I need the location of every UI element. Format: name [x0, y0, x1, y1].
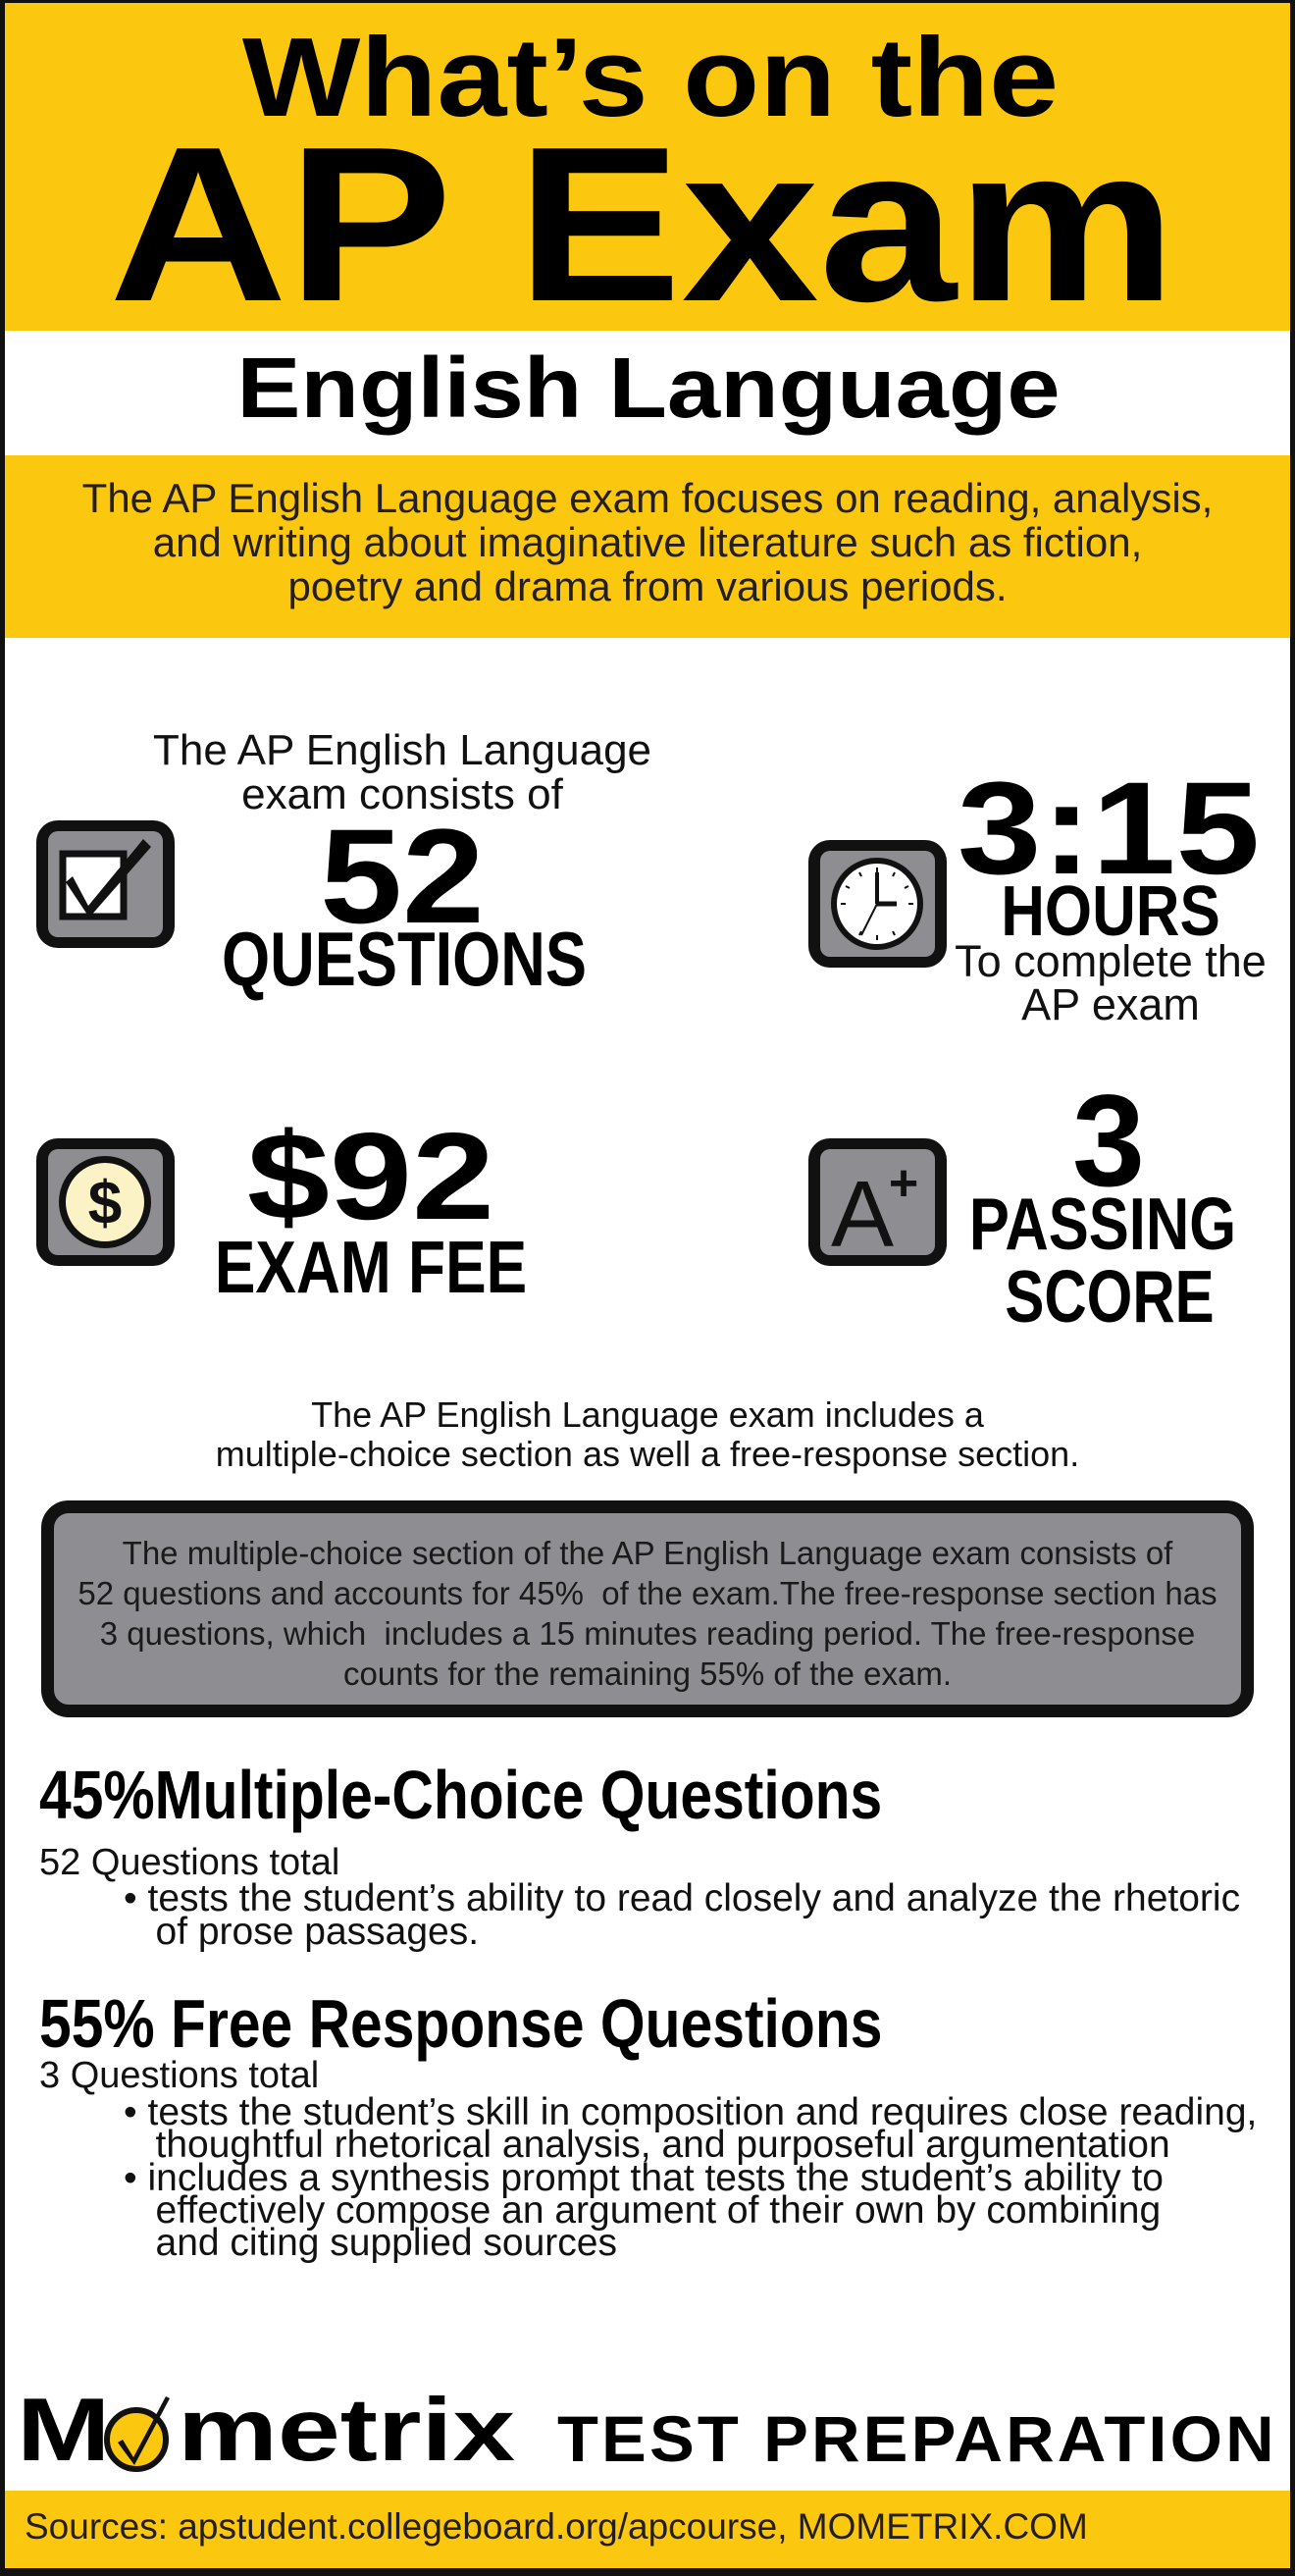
callout text: The multiple-choice section of the AP English Language exam consists of: [123, 1535, 1172, 1571]
icon: A plus grade: A: [831, 1162, 894, 1267]
title line 1: What’s on the: [242, 16, 1059, 140]
logo: Mometrix: [17, 2381, 515, 2480]
footer: sources bar: [0, 2491, 1295, 2569]
intro to sections: multiple-choice section as well a free-response section.: [216, 1434, 1079, 1474]
section: free response: [39, 1985, 1257, 2264]
stat: fee: [36, 1107, 527, 1308]
label SCORE: SCORE: [1005, 1255, 1215, 1338]
intro to sections: The AP English Language exam includes a: [311, 1394, 984, 1435]
logo letter M: M: [17, 2381, 111, 2480]
callout text: 52 questions and accounts for 45% of the exam.The free-response section has: [78, 1575, 1217, 1611]
bullet: • tests the student’s ability to read closely and analyze the rhetoric: [124, 1877, 1240, 1919]
bullets: and citing supplied sources: [155, 2222, 617, 2264]
subtitle band: [0, 331, 1295, 455]
bullet: [124, 1877, 1240, 1953]
intro text: exam consists of: [241, 770, 563, 818]
callout: summary box: [41, 1500, 1254, 1717]
stat: time: [808, 756, 1267, 1029]
bullets: thoughtful rhetorical analysis, and purposeful argumentation: [155, 2124, 1170, 2166]
number 52: 52: [320, 802, 485, 952]
logo letters metrix: metrix: [178, 2381, 515, 2480]
icon: check circle: [104, 2396, 170, 2472]
total: 52 Questions total: [39, 1842, 339, 1883]
heading: 45%Multiple-Choice Questions: [39, 1757, 882, 1833]
icon: clock: [808, 840, 947, 968]
description text: and writing about imaginative literature such as fiction,: [153, 519, 1142, 565]
icon: checkbox: [36, 820, 175, 948]
bullets: effectively compose an argument of their own by combining: [155, 2189, 1161, 2232]
total: 3 Questions total: [39, 2055, 319, 2096]
stat: questions: [36, 726, 651, 1002]
caption: AP exam: [1021, 979, 1200, 1029]
label PASSING: PASSING: [969, 1183, 1236, 1265]
tagline: TEST PREPARATION: [557, 2402, 1277, 2475]
heading: 55% Free Response Questions: [39, 1985, 882, 2062]
icon: dollar coin: $: [88, 1170, 122, 1237]
callout text: 3 questions, which includes a 15 minutes reading period. The free-response: [100, 1615, 1195, 1652]
icon: A plus grade: +: [889, 1155, 918, 1212]
number 3:15: 3:15: [958, 756, 1260, 902]
subtitle: English Language: [236, 341, 1061, 436]
title line 2: AP Exam: [109, 100, 1176, 347]
callout text: [78, 1535, 1217, 1692]
intro text: The AP English Language: [153, 726, 651, 774]
description text: The AP English Language exam focuses on reading, analysis,: [82, 475, 1213, 521]
header: yellow title band: [0, 0, 1295, 331]
icon: A plus grade: [808, 1138, 947, 1267]
description text: [82, 475, 1213, 609]
callout text: counts for the remaining 55% of the exam.: [343, 1656, 952, 1692]
bullets: • includes a synthesis prompt that tests the student’s ability to: [124, 2157, 1164, 2199]
intro to sections: [216, 1394, 1079, 1474]
bullet: of prose passages.: [155, 1911, 479, 1953]
sources text: Sources: apstudent.collegeboard.org/apcourse, MOMETRIX.COM: [25, 2506, 1088, 2547]
description text: poetry and drama from various periods.: [287, 563, 1007, 609]
bullets: • tests the student’s skill in composition and requires close reading,: [124, 2091, 1257, 2133]
intro text: [153, 726, 651, 818]
label HOURS: HOURS: [1001, 872, 1220, 951]
caption: To complete the: [955, 936, 1267, 986]
label QUESTIONS: QUESTIONS: [222, 916, 587, 1002]
description band: [0, 455, 1295, 638]
caption: [955, 936, 1267, 1029]
icon: dollar coin: [36, 1138, 175, 1266]
label EXAM FEE: EXAM FEE: [215, 1226, 527, 1308]
number 3: 3: [1072, 1069, 1145, 1214]
stat: passing score: [808, 1069, 1236, 1338]
bullets: [124, 2091, 1257, 2264]
number $92: $92: [247, 1107, 494, 1245]
section: multiple choice: [39, 1757, 1240, 1953]
